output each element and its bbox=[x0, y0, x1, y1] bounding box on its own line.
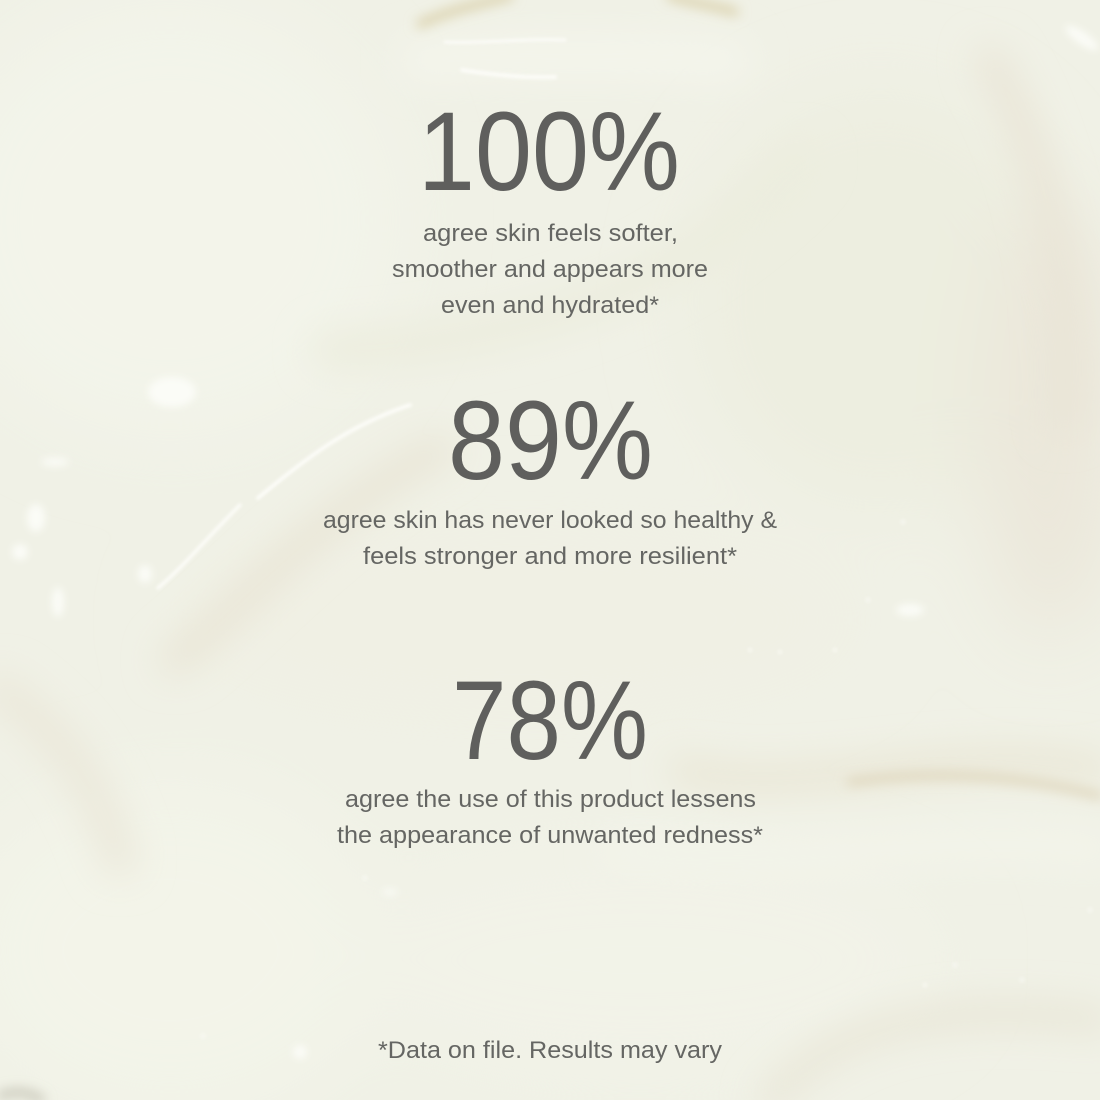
stat value: 78%: 78% bbox=[452, 658, 648, 783]
stat description: softer and smoother bbox=[392, 220, 708, 319]
footnote: *Data on file. Results may vary bbox=[378, 1037, 722, 1064]
stat value: 89%: 89% bbox=[448, 378, 653, 503]
stat value: 100%: 100% bbox=[418, 89, 680, 214]
stat description: less redness: the appearance of unwanted redness* bbox=[337, 822, 763, 849]
stat description: healthy and resilient: agree skin has never looked so healthy & bbox=[323, 507, 777, 534]
stat description: healthy and resilient: feels stronger and more resilient* bbox=[363, 543, 737, 570]
stat description: less redness: agree the use of this product lessens bbox=[345, 786, 756, 813]
stat description: less redness bbox=[337, 786, 763, 849]
stat description: softer and smoother: smoother and appears more bbox=[392, 256, 708, 283]
stat description: softer and smoother: even and hydrated* bbox=[441, 292, 659, 319]
stat description: healthy and resilient bbox=[323, 507, 777, 570]
stat: 78% bbox=[337, 658, 763, 849]
stat: 100% bbox=[392, 89, 708, 319]
stat description: softer and smoother: agree skin feels softer, bbox=[423, 220, 678, 247]
stat: 89% bbox=[323, 378, 777, 570]
